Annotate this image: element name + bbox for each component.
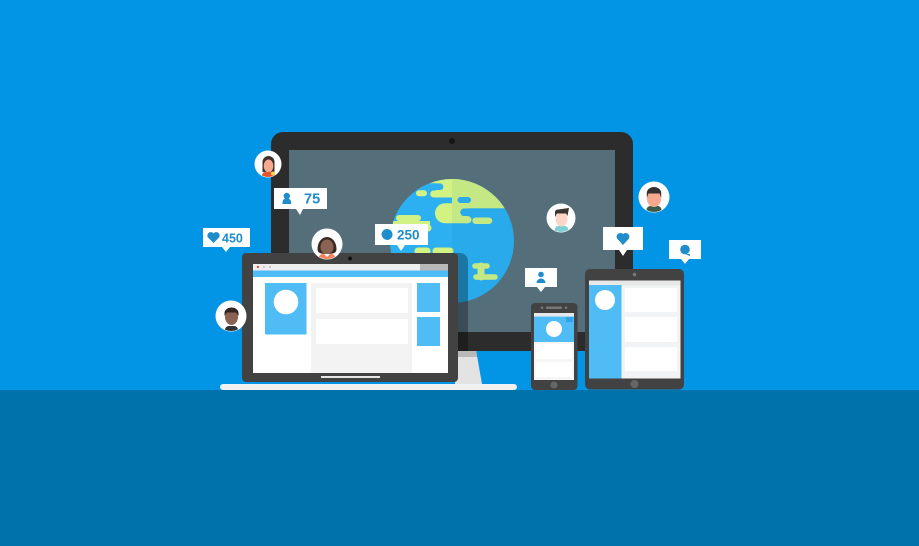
laptop base [220,384,517,390]
laptop screen [253,264,448,373]
callout: 75 followers: 75 [304,192,320,208]
callout: 250 comments: 250 [397,228,420,242]
background [0,0,919,390]
avatar: man left [216,300,246,333]
desktop monitor [271,132,633,351]
laptop shadow [456,253,468,351]
avatar: woman top left [254,150,282,178]
tablet [585,269,684,390]
callout: 75 followers [274,188,327,215]
callout: 450 likes: 450 [222,232,243,246]
phone [531,303,578,390]
desk band [0,390,919,546]
avatar: woman behind laptop [312,228,342,260]
avatar: man top right [638,182,670,212]
avatar: man centre [546,204,576,233]
globe land [393,179,505,226]
callout: heart [603,227,643,256]
callout: 250 comments [375,224,428,251]
globe [390,179,514,303]
callout: person [525,268,557,292]
callout: 450 likes [203,228,250,252]
monitor stand [455,350,482,384]
callout: chat [669,240,701,264]
laptop [242,253,458,382]
